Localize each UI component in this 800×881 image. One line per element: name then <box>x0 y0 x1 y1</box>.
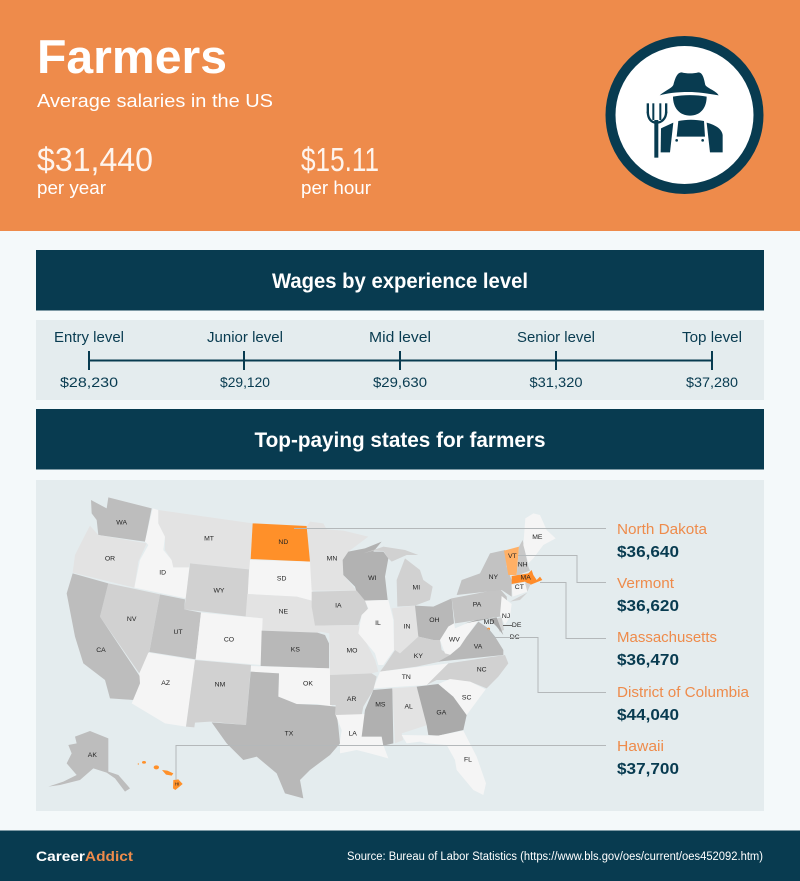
source: Source: Bureau of Labor Statistics (https://www.bls.gov/oes/current/oes452092.htm) <box>347 851 763 863</box>
hourly salary <box>301 141 379 198</box>
yearly salary: $31,440 <box>37 141 153 178</box>
map: western states <box>48 497 340 798</box>
yearly salary <box>37 141 153 198</box>
map: western states: CA <box>96 647 106 654</box>
top level: $37,280 <box>686 374 738 390</box>
heading bar: top-paying states <box>36 409 764 470</box>
map: eastern states: DC <box>510 634 520 641</box>
map: western states: NE <box>279 609 289 616</box>
map: western states: ID <box>159 569 166 576</box>
label: District of Columbia: District of Columbia <box>617 684 750 701</box>
map: western states: NV <box>127 616 137 623</box>
label: District of Columbia <box>617 684 750 724</box>
map: western states: KS <box>291 646 300 653</box>
entry level: $28,230 <box>60 374 118 390</box>
map: Hawaii: HI <box>175 781 179 786</box>
map: eastern states: NH <box>518 561 528 568</box>
top level: Top level <box>682 329 742 346</box>
header panel <box>0 0 800 231</box>
map: eastern states: MA <box>521 574 531 581</box>
leader lines <box>176 528 606 780</box>
label: Hawaii: $37,700 <box>617 761 679 778</box>
title: Farmers <box>37 30 227 83</box>
map: eastern states: NY <box>489 574 499 581</box>
mid level <box>369 329 431 390</box>
map: eastern states: ME <box>532 534 543 541</box>
map: western states: WA <box>116 520 127 527</box>
heading bar: wages by experience level <box>36 250 764 310</box>
map: western states: WY <box>213 588 225 595</box>
senior level <box>517 329 595 390</box>
map: eastern states: NC <box>477 667 487 674</box>
heading bar: wages by experience level: Wages by experience level <box>272 270 528 293</box>
top level <box>682 329 742 390</box>
map: eastern states: IL <box>375 620 381 627</box>
icon: farmer with pitchfork <box>610 41 758 189</box>
label: District of Columbia: $44,040 <box>617 707 679 724</box>
mid level: Mid level <box>369 329 431 346</box>
subtitle: Average salaries in the US <box>37 91 273 111</box>
map: eastern states: DE <box>512 622 522 629</box>
map: eastern states: MI <box>413 585 420 592</box>
map: eastern states: OH <box>429 617 440 624</box>
map: eastern states: KY <box>414 653 423 660</box>
map: eastern states: SC <box>462 695 471 702</box>
label: North Dakota <box>617 521 708 561</box>
heading bar: top-paying states: Top-paying states for farmers <box>254 429 546 452</box>
yearly salary: per year <box>37 178 106 198</box>
hourly salary: $15.11 <box>301 141 379 178</box>
map: eastern states: GA <box>436 709 447 716</box>
map: eastern states: NJ <box>502 613 510 620</box>
hourly salary: per hour <box>301 178 371 198</box>
junior level: Junior level <box>207 329 283 346</box>
map: eastern states: LA <box>348 730 357 737</box>
label: Vermont: $36,620 <box>617 598 679 615</box>
map: eastern states: IA <box>335 603 342 610</box>
logo: CareerAddict: Career Addict <box>36 849 134 864</box>
label: Massachusetts: $36,470 <box>617 652 679 669</box>
map: western states: SD <box>277 576 286 583</box>
map: eastern states: VA <box>474 643 483 650</box>
map: eastern states: MD <box>484 619 494 626</box>
label: Hawaii: Hawaii <box>617 738 664 755</box>
map: eastern states: MN <box>327 555 337 562</box>
map: eastern states: WV <box>449 636 460 643</box>
map: Hawaii <box>138 761 183 790</box>
label: Massachusetts <box>617 629 717 669</box>
label: North Dakota: $36,640 <box>617 544 679 561</box>
senior level: $31,320 <box>530 374 583 390</box>
label: Vermont: Vermont <box>617 575 675 592</box>
map: western states: UT <box>173 629 183 636</box>
senior level: Senior level <box>517 329 595 346</box>
label: Vermont <box>617 575 679 615</box>
map: western states: OK <box>303 681 313 688</box>
map: western states: OR <box>105 556 115 563</box>
map: eastern states: WI <box>368 575 377 582</box>
map: western states: NM <box>215 682 226 689</box>
map: eastern states: MS <box>375 702 386 709</box>
map: eastern states <box>307 513 556 795</box>
map: western states: AK <box>88 752 97 759</box>
label: Massachusetts: Massachusetts <box>617 629 717 646</box>
junior level <box>207 329 283 390</box>
footer <box>0 830 800 881</box>
map: eastern states: AR <box>347 696 356 703</box>
map: eastern states: MO <box>346 648 357 655</box>
map: eastern states: PA <box>473 602 482 609</box>
entry level: Entry level <box>54 329 124 346</box>
map: western states: TX <box>285 730 294 737</box>
mid level: $29,630 <box>373 374 427 390</box>
map: eastern states: VT <box>508 553 518 560</box>
map: eastern states: TN <box>402 674 411 681</box>
panel: experience timeline <box>36 320 764 400</box>
map: western states: CO <box>224 637 234 644</box>
map: western states: ND <box>278 539 288 546</box>
junior level: $29,120 <box>220 374 270 390</box>
map: western states: MT <box>204 536 215 543</box>
map: eastern states: FL <box>464 757 472 764</box>
entry level <box>54 329 124 390</box>
map: eastern states: IN <box>404 624 410 631</box>
label: North Dakota: North Dakota <box>617 521 708 538</box>
label: Hawaii <box>617 738 679 778</box>
map: eastern states: CT <box>515 584 525 591</box>
map: western states: AZ <box>161 680 170 687</box>
map: eastern states: AL <box>404 703 413 710</box>
panel: map of top-paying states <box>36 480 764 811</box>
